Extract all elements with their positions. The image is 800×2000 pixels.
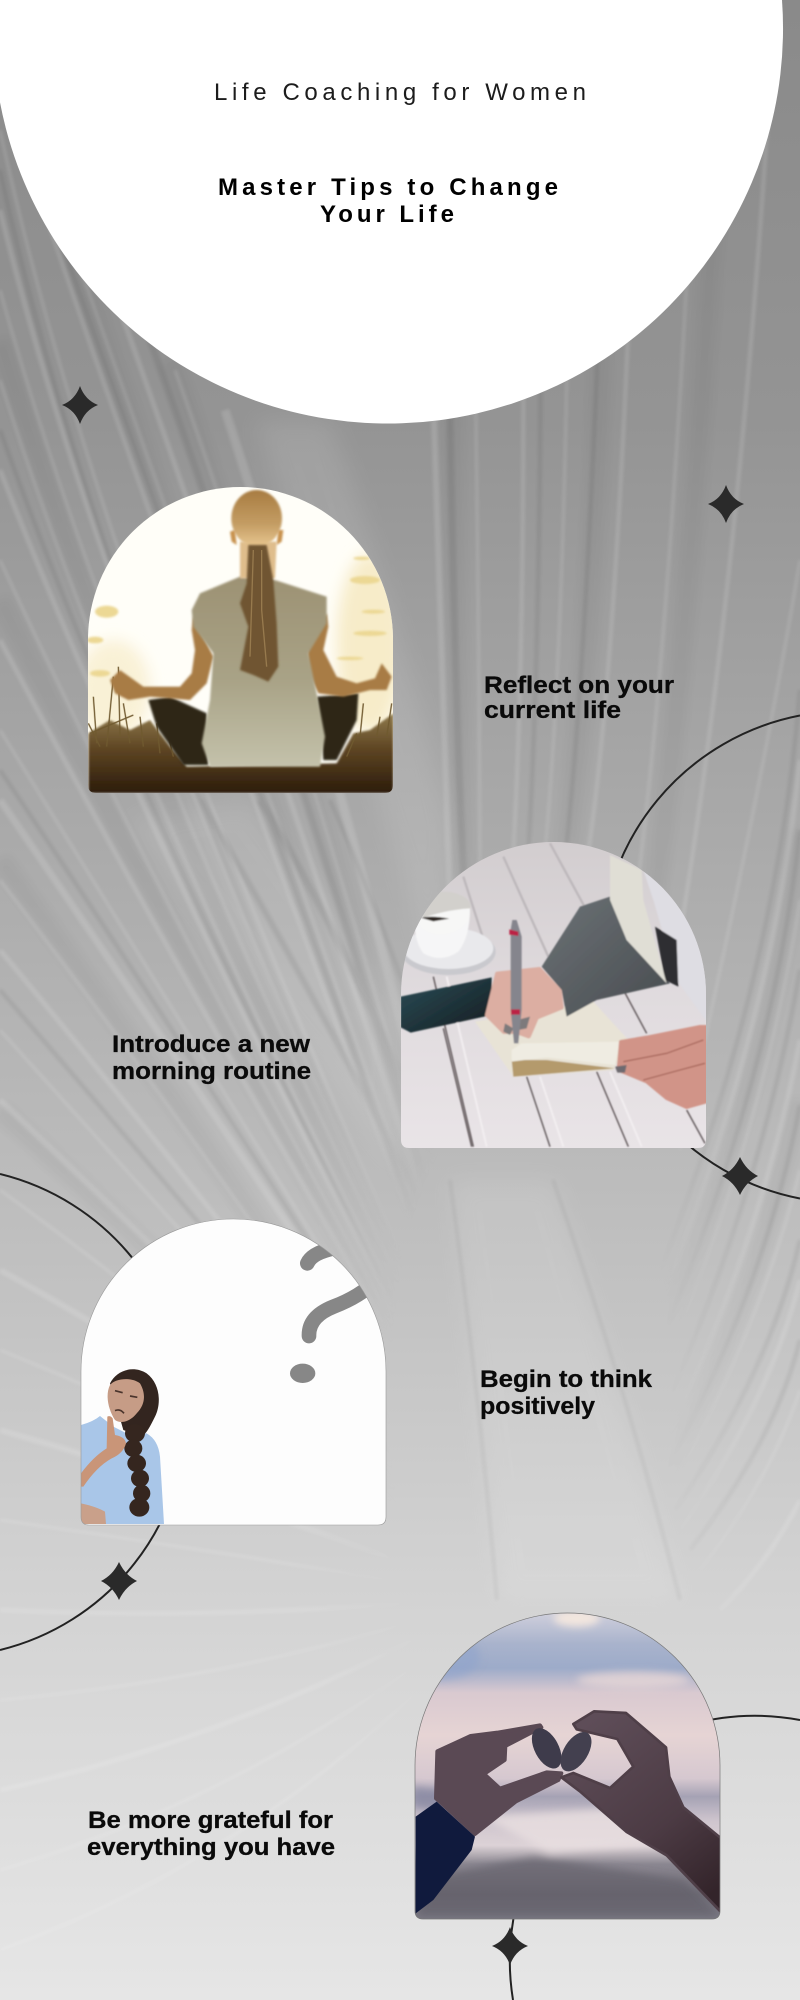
shirt bbox=[81, 1416, 164, 1524]
white scarf bbox=[610, 855, 667, 983]
braid bbox=[124, 1424, 150, 1517]
hair bbox=[110, 1369, 159, 1437]
question mark bbox=[307, 1248, 377, 1336]
label: gratitude bbox=[87, 1807, 335, 1861]
notebook bbox=[475, 1002, 628, 1077]
legs bbox=[148, 693, 358, 765]
phone bbox=[401, 977, 492, 1033]
subtitle: Life Coaching for Women bbox=[214, 79, 586, 106]
photo arch: meditating woman bbox=[77, 487, 403, 793]
label: think positively: Begin to think bbox=[480, 1366, 653, 1393]
star 3 bbox=[722, 1157, 758, 1195]
face bbox=[108, 1379, 144, 1422]
main heading: Master Tips to Change bbox=[218, 174, 558, 201]
arms bbox=[110, 613, 392, 700]
head bbox=[231, 490, 282, 547]
writing hand bbox=[487, 969, 561, 1036]
right hand bbox=[561, 1711, 721, 1912]
label: morning routine: morning routine bbox=[112, 1058, 311, 1085]
tan page edge bbox=[512, 1060, 615, 1077]
photo arch: writing in a notebook bbox=[401, 842, 707, 1148]
label: gratitude: everything you have bbox=[87, 1834, 335, 1861]
saucer and cup bbox=[401, 928, 496, 975]
decorative arc right upper bbox=[601, 716, 800, 1198]
ears bbox=[230, 530, 283, 545]
label: morning routine bbox=[112, 1031, 311, 1085]
star 4 bbox=[101, 1562, 137, 1600]
top white circle bbox=[0, 0, 783, 424]
nails bbox=[503, 1017, 530, 1035]
grass bbox=[88, 713, 393, 793]
arm and hand bbox=[81, 1416, 126, 1487]
sleeve bbox=[416, 1802, 475, 1913]
water glare bbox=[87, 557, 387, 677]
sweater sleeve bbox=[542, 897, 670, 1017]
shirt bbox=[192, 577, 327, 767]
soft clouds bbox=[400, 1610, 720, 1917]
label: gratitude: Be more grateful for bbox=[88, 1807, 333, 1834]
pen bbox=[511, 920, 522, 1043]
neck bbox=[240, 542, 277, 578]
label: reflect: current life bbox=[484, 697, 621, 724]
photo frame 4 outline bbox=[415, 1613, 720, 1919]
label: reflect bbox=[484, 672, 674, 724]
main heading: Your Life bbox=[320, 201, 454, 228]
water haze bbox=[77, 553, 403, 740]
stripes shirt bbox=[644, 872, 706, 992]
right hand bbox=[618, 1027, 707, 1107]
star 2 bbox=[708, 485, 744, 523]
label: think positively: positively bbox=[480, 1393, 596, 1420]
decorative arc lower right bbox=[510, 1716, 800, 2000]
label: morning routine: Introduce a new bbox=[112, 1031, 310, 1058]
photo arch: thinking woman bbox=[81, 1219, 386, 1525]
facial features bbox=[115, 1391, 137, 1413]
decorative arc left bbox=[0, 1174, 187, 1650]
label: think positively bbox=[480, 1366, 653, 1420]
label: reflect: Reflect on your bbox=[484, 672, 674, 699]
table plank lines bbox=[433, 843, 705, 1147]
ponytail bbox=[240, 545, 278, 682]
photo arch: hands holding heart shell bbox=[400, 1610, 721, 1919]
main heading bbox=[218, 174, 558, 228]
star 5 bbox=[492, 1927, 528, 1965]
shell halves bbox=[532, 1728, 562, 1768]
star 1 bbox=[62, 386, 98, 424]
left hand bbox=[436, 1725, 561, 1834]
photo frame 3 outline bbox=[81, 1219, 386, 1525]
